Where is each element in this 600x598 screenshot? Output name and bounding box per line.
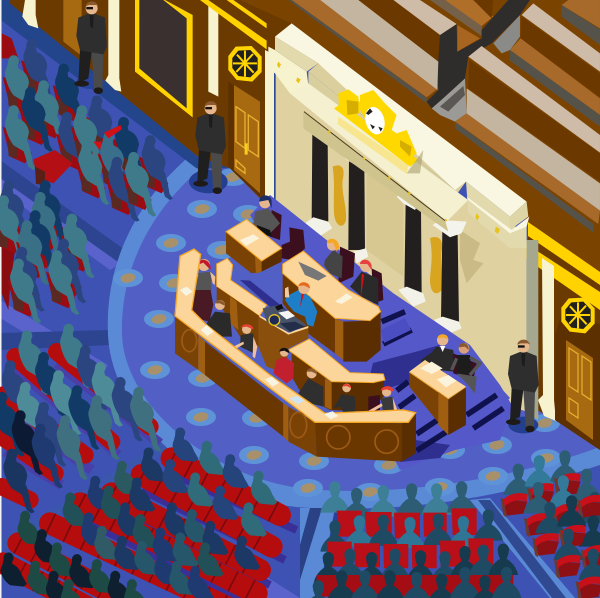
door with octagon window: [228, 46, 262, 197]
door with octagon window: [555, 298, 600, 450]
painting in gold frame: [135, 0, 193, 117]
bench B: [468, 46, 600, 153]
bench A: [393, 0, 457, 35]
gold drapes: [333, 165, 346, 226]
door left: [63, 0, 82, 56]
small left desk: [226, 219, 282, 273]
long front desk: [175, 249, 416, 462]
right presiding desk: [283, 251, 381, 362]
beige wall: [275, 73, 527, 412]
seating: lower wedge block: [1, 427, 297, 598]
bench D: [562, 0, 600, 28]
brown haired man: [298, 378, 323, 407]
dais platform and steps: [250, 195, 513, 470]
staff: blond man: [422, 334, 454, 372]
seating: upper left block: [2, 33, 173, 222]
seated man with red hair, right: [350, 260, 383, 305]
floor medallions: [113, 168, 561, 501]
podium: [258, 304, 308, 373]
clock sculpture: [334, 89, 423, 174]
carved rostrum wall: [265, 23, 538, 420]
guard by pilaster: [193, 101, 226, 194]
plinth: [303, 230, 460, 353]
top gold moulding: [200, 0, 267, 49]
woman in red jacket: [273, 357, 294, 383]
bearded man: [207, 312, 232, 337]
empty chair: [282, 227, 305, 260]
pillar 1: [22, 0, 38, 28]
guard top left: [74, 1, 107, 94]
corridor: [493, 15, 520, 53]
desk: [409, 360, 466, 435]
rostrum desks and figures: [175, 195, 416, 462]
seated woman blond: [324, 239, 355, 283]
staff: brunette woman: [452, 343, 480, 393]
columns: [303, 122, 467, 334]
speaker in blue jacket: [285, 282, 317, 327]
seating: bottom centre block: [304, 481, 521, 598]
pillar 2: [105, 0, 121, 92]
back wall left with painting, doors and pillars: [2, 0, 300, 243]
entablature: [268, 47, 308, 93]
red haired standing woman: [190, 290, 213, 322]
guard by right door: [506, 340, 539, 433]
pillar 3: [208, 6, 218, 97]
seating: right block: [501, 450, 600, 598]
central floor circle: [108, 100, 600, 509]
seating: lower left block: [0, 324, 161, 513]
seated clerk blue hair: [253, 195, 282, 240]
balcony benches: [240, 0, 600, 277]
woman with red hair bun: [368, 395, 380, 412]
red haired man front: [333, 394, 355, 417]
seating: left middle block: [0, 180, 95, 323]
guards: [74, 1, 228, 194]
middle desk with figures: [217, 258, 385, 412]
front row figures: [190, 259, 398, 421]
shadows on dais: [240, 280, 287, 310]
right small desk with staff: [409, 334, 480, 435]
right wall with pilaster and door: [525, 222, 600, 450]
red haired clerk with laptop: [240, 333, 254, 353]
bench C: [522, 3, 600, 72]
pilaster: [538, 258, 556, 421]
gold stars: [277, 62, 500, 234]
